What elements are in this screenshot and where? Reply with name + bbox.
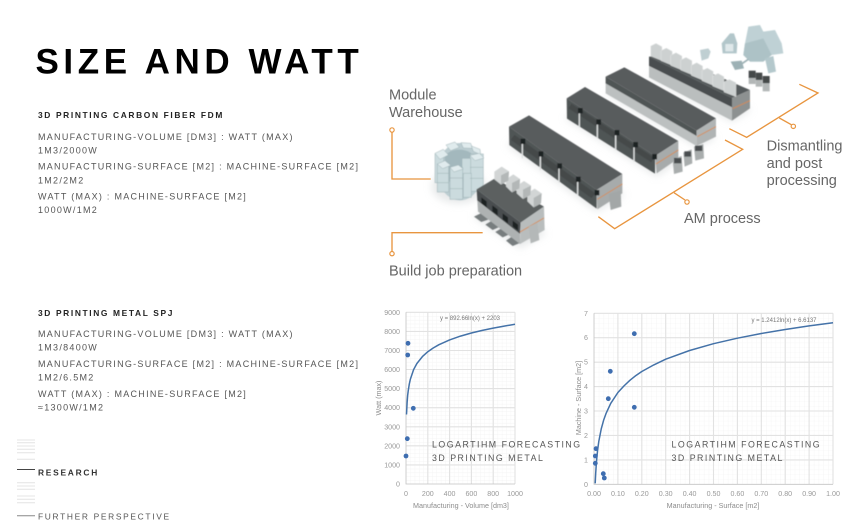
y axis labels: 7000	[384, 347, 400, 355]
ratios: metal SPJ: MANUFACTURING-SURFACE [M2] : MACHINE-SURFACE [M2]	[38, 359, 359, 369]
machine: dismantling line	[649, 43, 750, 121]
trend line	[406, 324, 515, 414]
data points	[593, 331, 637, 480]
text block: 3D printing metal SPJ	[38, 308, 359, 412]
y axis labels: 6000	[384, 366, 400, 374]
y axis title: Watt (max)	[374, 381, 383, 415]
y axis labels: 2000	[384, 442, 400, 450]
heading: carbon fiber FDM: 3D PRINTING CARBON FIBER FDM	[38, 110, 224, 120]
ratios: metal SPJ	[38, 329, 359, 412]
x axis labels: 0.10	[611, 490, 625, 498]
nav item: research: RESEARCH	[38, 468, 99, 478]
y axis labels: 4	[584, 383, 588, 391]
machine: small modules beside line	[673, 144, 704, 174]
equation: y = 1.2412ln(x) + 6.6137	[751, 318, 817, 324]
ratios: carbon fiber FDM: MANUFACTURING-VOLUME [DM3] : WATT (MAX)	[38, 132, 294, 142]
trend line	[595, 323, 833, 483]
y axis labels: 1	[584, 456, 588, 464]
machine: AM process line 3	[606, 67, 716, 146]
ratios: metal SPJ: ≈1300W/1M2	[38, 402, 104, 412]
chart: manufacturing volume vs watt	[374, 309, 582, 510]
x axis title: Manufacturing - Surface [m2]	[667, 501, 759, 510]
y axis labels: 8000	[384, 328, 400, 336]
y axis labels: 3000	[384, 423, 400, 431]
process illustration	[389, 25, 843, 279]
x axis labels: 800	[487, 490, 499, 498]
callout: AM process: AM process	[684, 211, 761, 227]
y axis labels: 5000	[384, 385, 400, 393]
x axis labels: 0.80	[778, 490, 792, 498]
y axis labels: 2	[584, 432, 588, 440]
ratios: carbon fiber FDM: MANUFACTURING-SURFACE [M2] : MACHINE-SURFACE [M2]	[38, 162, 359, 172]
x axis labels: 0.20	[635, 490, 649, 498]
callout: dismantling and post processing: processing	[767, 173, 837, 189]
side navigation	[17, 440, 171, 522]
callout: module warehouse: Module	[389, 88, 437, 104]
overlay label: LOGARTIHM FORECASTING	[432, 440, 582, 450]
x axis labels	[404, 490, 523, 498]
x axis title: Manufacturing - Volume [dm3]	[413, 501, 509, 510]
ratios: carbon fiber FDM: 1M3/2000W	[38, 146, 98, 156]
callout: AM process	[598, 140, 761, 229]
overlay label	[432, 440, 582, 463]
ratios: metal SPJ: WATT (MAX) : MACHINE-SURFACE [M2]	[38, 389, 247, 399]
x axis labels: 0.60	[730, 490, 744, 498]
ratios: metal SPJ: 1M3/8400W	[38, 342, 98, 352]
x axis labels	[587, 490, 840, 498]
x axis labels: 0.50	[707, 490, 720, 498]
x axis labels: 600	[465, 490, 477, 498]
overlay label: 3D PRINTING METAL	[672, 453, 784, 463]
ratios: carbon fiber FDM: WATT (MAX) : MACHINE-SURFACE [M2]	[38, 192, 247, 202]
callout: dismantling and post processing: Dismantling	[767, 139, 843, 155]
machine: AM process line 1	[509, 115, 622, 210]
y axis labels: 7	[584, 310, 588, 318]
ratios: carbon fiber FDM	[38, 132, 359, 215]
x axis labels: 0.40	[683, 490, 697, 498]
heading: metal SPJ: 3D PRINTING METAL SPJ	[38, 308, 174, 318]
callout: build job preparation	[389, 233, 522, 279]
machine: build job preparation	[474, 167, 545, 246]
x axis labels: 0.00	[587, 490, 601, 498]
y axis labels: 9000	[384, 309, 400, 317]
machine: AM process line 2	[567, 87, 678, 174]
plot grid	[594, 313, 833, 484]
text block: 3D printing carbon fiber FDM	[38, 110, 359, 215]
x axis labels: 400	[444, 490, 456, 498]
nav item: further perspective: FURTHER PERSPECTIVE	[38, 512, 171, 522]
chart: manufacturing surface vs machine surface	[574, 310, 840, 510]
machine: post-processing equipment	[700, 25, 783, 91]
y axis labels	[584, 310, 588, 489]
overlay label: 3D PRINTING METAL	[432, 453, 544, 463]
ratios: metal SPJ: 1M2/6.5M2	[38, 372, 95, 382]
ratios: carbon fiber FDM: 1M2/2M2	[38, 176, 84, 186]
y axis labels: 0	[584, 481, 588, 489]
x axis labels: 1000	[507, 490, 523, 498]
machine: module warehouse ring	[435, 142, 484, 200]
y axis labels: 6	[584, 334, 588, 342]
callout: dismantling and post processing	[729, 84, 843, 189]
callout: build job preparation: Build job preparation	[389, 263, 522, 279]
x axis labels: 0	[404, 490, 408, 498]
y axis title: Machine - Surface [m2]	[574, 361, 583, 435]
y axis labels: 5	[584, 359, 588, 367]
callout: module warehouse	[389, 88, 463, 179]
x axis labels: 200	[422, 490, 434, 498]
ratios: metal SPJ: MANUFACTURING-VOLUME [DM3] : WATT (MAX)	[38, 329, 294, 339]
title: SIZE AND WATT	[36, 42, 363, 82]
x axis labels: 0.90	[802, 490, 816, 498]
y axis labels: 0	[396, 480, 400, 488]
ratios: carbon fiber FDM: 1000W/1M2	[38, 205, 98, 215]
callout: dismantling and post processing: and post	[767, 156, 822, 172]
x axis labels: 1.00	[826, 490, 840, 498]
y axis labels: 1000	[384, 461, 400, 469]
overlay label: LOGARTIHM FORECASTING	[672, 440, 821, 450]
overlay label	[672, 440, 821, 463]
plot grid	[406, 312, 515, 484]
data points	[404, 341, 416, 458]
x axis labels: 0.70	[754, 490, 768, 498]
y axis labels: 3	[584, 408, 588, 416]
y axis labels	[384, 309, 400, 488]
y axis labels: 4000	[384, 404, 400, 412]
x axis labels: 0.30	[659, 490, 673, 498]
callout: module warehouse: Warehouse	[389, 105, 463, 121]
equation: y = 892.66ln(x) + 2203	[440, 316, 501, 322]
